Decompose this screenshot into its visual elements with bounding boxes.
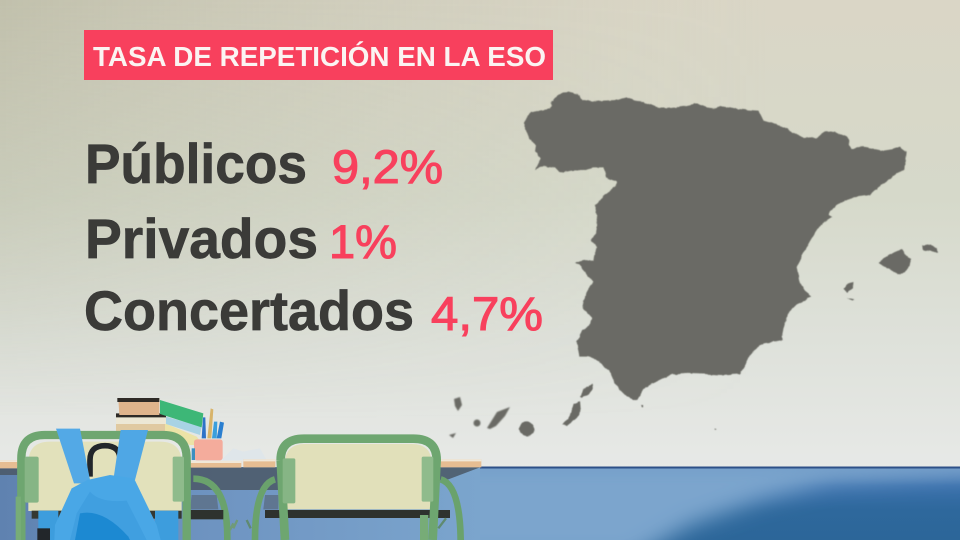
photo: desks, chairs and backpack <box>0 398 481 540</box>
El Hierro <box>449 433 456 438</box>
La Gomera <box>474 420 480 426</box>
title banner: TASA DE REPETICIÓN EN LA ESO <box>93 41 546 72</box>
row: Concertados: Concertados <box>84 279 414 342</box>
title banner <box>84 30 553 80</box>
row: Públicos: 9,2% <box>332 140 443 193</box>
Menorca <box>923 244 938 254</box>
row: Privados: 1% <box>329 215 397 268</box>
Mallorca <box>878 249 912 275</box>
map of Spain <box>519 92 938 436</box>
Fuerteventura <box>562 402 581 425</box>
Ibiza <box>844 282 854 292</box>
icon: blue backpack <box>37 429 178 540</box>
row: Públicos <box>85 132 443 195</box>
desk tops <box>0 459 481 468</box>
left chair <box>18 435 237 540</box>
map geometry <box>519 92 938 436</box>
mainland Spain <box>523 92 907 401</box>
icon: pencil cup <box>192 408 267 460</box>
row: Públicos: Públicos <box>85 132 307 195</box>
Gran Canaria <box>519 421 534 436</box>
desk shadow <box>0 467 480 490</box>
icon: stack of books <box>116 398 203 445</box>
row: Concertados: 4,7% <box>431 287 543 340</box>
La Palma <box>454 397 462 411</box>
right chair <box>247 439 461 540</box>
row: Privados: Privados <box>85 207 318 270</box>
Lanzarote <box>580 383 593 398</box>
Formentera <box>848 298 854 301</box>
Ceuta and Melilla <box>641 405 716 429</box>
Tenerife <box>487 407 510 429</box>
Canary Islands, western group <box>449 397 510 438</box>
